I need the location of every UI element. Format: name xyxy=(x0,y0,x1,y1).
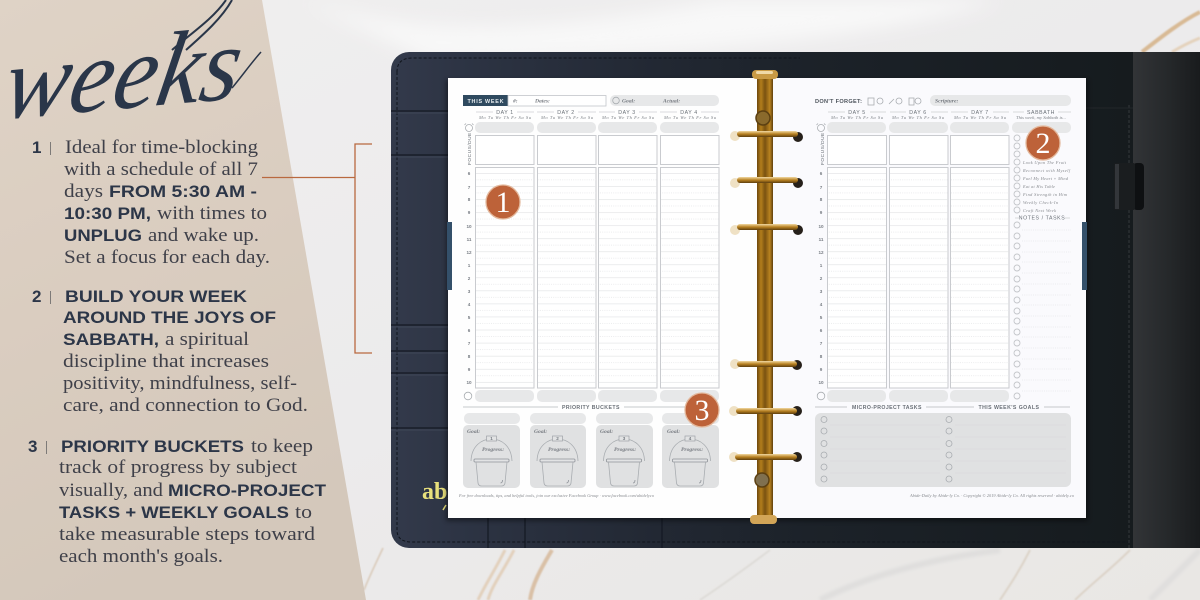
binder rings and gold spine xyxy=(729,70,803,524)
text block: item 2: positivity, mindfulness, self- xyxy=(63,373,297,394)
hour labels left: 8 xyxy=(468,354,471,359)
sabbath checklist: Eat at His Table xyxy=(1022,184,1055,189)
text block: item 1: UNPLUG xyxy=(64,226,142,245)
hour labels right: 6 xyxy=(820,171,823,176)
text block: item 1: 1 xyxy=(32,138,41,157)
hour labels right: 8 xyxy=(820,354,823,359)
text block: item 3: 3 xyxy=(28,437,37,456)
day 6 column xyxy=(889,122,948,402)
bucket 3 xyxy=(596,413,653,488)
day headers left: Mo Tu We Th Fr Sa Su xyxy=(540,115,594,120)
text block: item 2: care, and connection to God. xyxy=(63,395,308,416)
hour labels right: 1 xyxy=(820,263,823,268)
this week header: Actual: xyxy=(662,98,680,104)
badge 2: 2 xyxy=(1036,127,1050,160)
text block: item 1: Ideal for time-blocking xyxy=(65,137,259,158)
bucket 4: 4 xyxy=(689,436,692,441)
sabbath checklist: Look Upon The Fruit xyxy=(1022,160,1067,165)
text block: item 1: 10:30 PM, xyxy=(64,204,151,223)
text block: item 3: to keep xyxy=(251,436,313,457)
sabbath checklist xyxy=(1012,122,1071,222)
hour labels left: 4 xyxy=(468,302,471,307)
text block: item 3: to xyxy=(295,502,312,523)
day 2 column xyxy=(537,122,596,402)
strap closure xyxy=(1114,163,1144,210)
panel: right planner page xyxy=(773,78,1086,518)
sabbath checklist: Fuel My Heart + Mind xyxy=(1022,176,1069,181)
day headers right: SABBATH xyxy=(1027,110,1055,116)
bucket 1: 1 xyxy=(490,436,493,441)
day headers right: DAY 7 xyxy=(971,110,989,116)
don't forget header: DON'T FORGET: xyxy=(815,99,862,105)
bucket 1 xyxy=(463,413,520,488)
bucket 3: Goal: xyxy=(600,429,613,435)
sabbath checklist: Reconnect with Myself xyxy=(1022,168,1071,173)
bucket 1: Progress: xyxy=(482,447,504,453)
text block: item 3 xyxy=(28,436,327,567)
hour labels left: 9 xyxy=(468,367,471,372)
bucket 2: Progress: xyxy=(548,447,570,453)
hour labels left: 12 xyxy=(466,250,472,255)
day 4 column xyxy=(660,122,719,402)
don't forget header xyxy=(815,95,1071,106)
hour labels left: 7 xyxy=(468,341,471,346)
heading: micro-project tasks and goals xyxy=(815,405,1070,411)
text block: item 1 xyxy=(32,137,270,268)
badge 1: 1 xyxy=(496,186,510,219)
hour labels left: 9 xyxy=(468,210,471,215)
day headers right: Mo Tu We Th Fr Sa Su xyxy=(891,115,945,120)
hour labels left: 2 xyxy=(468,276,471,281)
panel: tasks and goals grey box xyxy=(815,413,1071,487)
hour labels left: 5 xyxy=(468,315,471,320)
focus label right: FOCUS/DUE xyxy=(820,132,826,165)
day headers left: Mo Tu We Th Fr Sa Su xyxy=(478,115,532,120)
text block: item 2: 2 xyxy=(32,287,41,306)
planner binder cover xyxy=(391,52,1200,548)
badge 1 xyxy=(486,185,520,219)
bucket 3: 3 xyxy=(623,436,626,441)
page shadow xyxy=(446,80,1088,521)
hour labels left: 6 xyxy=(468,328,471,333)
badge 2 xyxy=(1026,126,1060,160)
day headers left: DAY 4 xyxy=(680,110,698,116)
bucket 1: Goal: xyxy=(467,429,480,435)
heading: micro-project tasks and goals: THIS WEEK'S GOALS xyxy=(978,405,1040,411)
badge 3 xyxy=(685,393,719,427)
text block: item 2: BUILD YOUR WEEK xyxy=(65,287,248,306)
bucket 3: Progress: xyxy=(614,447,636,453)
hour labels left: 3 xyxy=(468,289,471,294)
hour labels right: 12 xyxy=(818,250,824,255)
day headers right: Mo Tu We Th Fr Sa Su xyxy=(953,115,1007,120)
tab: right page blue divider xyxy=(1082,222,1087,290)
hour labels left: 8 xyxy=(468,197,471,202)
text block: item 1: with a schedule of all 7 xyxy=(64,159,258,180)
day 7 column xyxy=(950,122,1009,402)
day headers left: DAY 3 xyxy=(618,110,636,116)
day headers left: DAY 2 xyxy=(557,110,575,116)
unplug icon left xyxy=(464,392,472,400)
heading: priority buckets: PRIORITY BUCKETS xyxy=(562,405,620,411)
hour labels right: 9 xyxy=(820,367,823,372)
text block: item 1: FROM 5:30 AM - xyxy=(109,182,257,201)
arrow: orange bracket connector xyxy=(262,144,372,353)
hour labels right: 9 xyxy=(820,210,823,215)
logo: gold foil abide: abide xyxy=(422,479,478,505)
hour labels right xyxy=(818,171,824,385)
text block: item 3: visually, and xyxy=(59,480,164,501)
this week header: Dates: xyxy=(534,98,550,104)
panel: left planner page xyxy=(448,78,757,518)
hour labels left: 6 xyxy=(468,171,471,176)
day headers left: Mo Tu We Th Fr Sa Su xyxy=(601,115,655,120)
hour labels right: 2 xyxy=(820,276,823,281)
day headers left: DAY 1 xyxy=(496,110,514,116)
hour labels right: 10 xyxy=(818,224,824,229)
day headers right: DAY 6 xyxy=(909,110,927,116)
text block: item 1: Set a focus for each day. xyxy=(64,247,270,268)
text block: item 1: with times to xyxy=(157,203,267,224)
this week header: THIS WEEK xyxy=(468,99,504,105)
hour labels right: 5 xyxy=(820,315,823,320)
hour labels right: 6 xyxy=(820,328,823,333)
hour labels right: 7 xyxy=(820,341,823,346)
title: weeks: weeks xyxy=(0,4,252,142)
text block: item 3: MICRO-PROJECT xyxy=(168,481,327,500)
day headers left: Mo Tu We Th Fr Sa Su xyxy=(663,115,717,120)
panel: left beige text panel xyxy=(0,0,366,600)
hour labels left: 10 xyxy=(466,224,472,229)
hour labels right: 10 xyxy=(818,380,824,385)
hour labels right: 3 xyxy=(820,289,823,294)
this week header: Goal: xyxy=(622,98,635,104)
bucket 2 xyxy=(530,413,586,488)
hour labels left: 11 xyxy=(467,237,472,242)
hour labels right: 8 xyxy=(820,197,823,202)
hour labels right: 11 xyxy=(819,237,824,242)
day headers right: DAY 5 xyxy=(848,110,866,116)
text block: item 3: each month's goals. xyxy=(59,546,223,567)
text block: item 3: PRIORITY BUCKETS xyxy=(61,437,244,456)
day 1 column xyxy=(475,122,534,402)
bucket 2: 2 xyxy=(556,436,559,441)
sabbath checklist: Find Strength in Him xyxy=(1022,192,1067,197)
text block: item 2: AROUND THE JOYS OF xyxy=(63,308,276,327)
don't forget header: Scripture: xyxy=(935,98,958,104)
text block: item 3: TASKS + WEEKLY GOALS xyxy=(59,503,289,522)
focus label left: FOCUS/DUE xyxy=(467,132,473,165)
text block: item 3: track of progress by subject xyxy=(59,457,298,478)
hour labels right: 4 xyxy=(820,302,823,307)
text block: item 1: and wake up. xyxy=(148,225,259,246)
text block: item 3: take measurable steps toward xyxy=(59,524,316,545)
alarm icon left xyxy=(464,124,474,132)
this week header xyxy=(463,95,719,106)
text block: item 1: days xyxy=(64,181,103,202)
notes task rows xyxy=(1014,222,1071,399)
sabbath checklist: Craft Next Week xyxy=(1023,208,1056,213)
hour labels left: 1 xyxy=(468,263,471,268)
tab: left page blue divider xyxy=(447,222,452,290)
hour labels right: 7 xyxy=(820,185,823,190)
sabbath checklist: Weekly Check-In xyxy=(1023,200,1058,205)
day headers right: This week, my Sabbath is... xyxy=(1016,115,1066,121)
sabbath checklist: NOTES / TASKS xyxy=(1019,216,1065,222)
this week header: #: xyxy=(512,98,518,104)
alarm icon right xyxy=(816,124,826,132)
day headers right: Mo Tu We Th Fr Sa Su xyxy=(830,115,884,120)
bucket 4: Goal: xyxy=(667,429,680,435)
text block: item 2: SABBATH, xyxy=(63,330,159,349)
day headers left xyxy=(476,110,719,120)
hour labels left xyxy=(466,171,472,385)
day headers right xyxy=(828,110,1071,121)
footer left: For free downloads, tips, and helpful tools, join our exclusive Facebook Group · www.facebook.com/abidelyco xyxy=(458,493,655,499)
text block: item 2 xyxy=(32,287,308,416)
bucket 4: Progress: xyxy=(681,447,703,453)
badge 3: 3 xyxy=(694,394,710,427)
hour labels left: 7 xyxy=(468,185,471,190)
unplug icon right xyxy=(817,392,825,400)
text block: item 2: discipline that increases xyxy=(63,351,269,372)
bucket 4 xyxy=(662,413,719,488)
text block: item 2: a spiritual xyxy=(165,329,249,350)
footer right: Abide-Daily by Abide-ly Co. · Copyright © 2019 Abide-ly Co. All rights reserved · abidely.co xyxy=(909,493,1075,498)
heading: micro-project tasks and goals: MICRO-PROJECT TASKS xyxy=(852,405,922,411)
day 5 column xyxy=(827,122,886,402)
day 3 column xyxy=(598,122,657,402)
hour labels left: 10 xyxy=(466,380,472,385)
bucket 2: Goal: xyxy=(534,429,547,435)
